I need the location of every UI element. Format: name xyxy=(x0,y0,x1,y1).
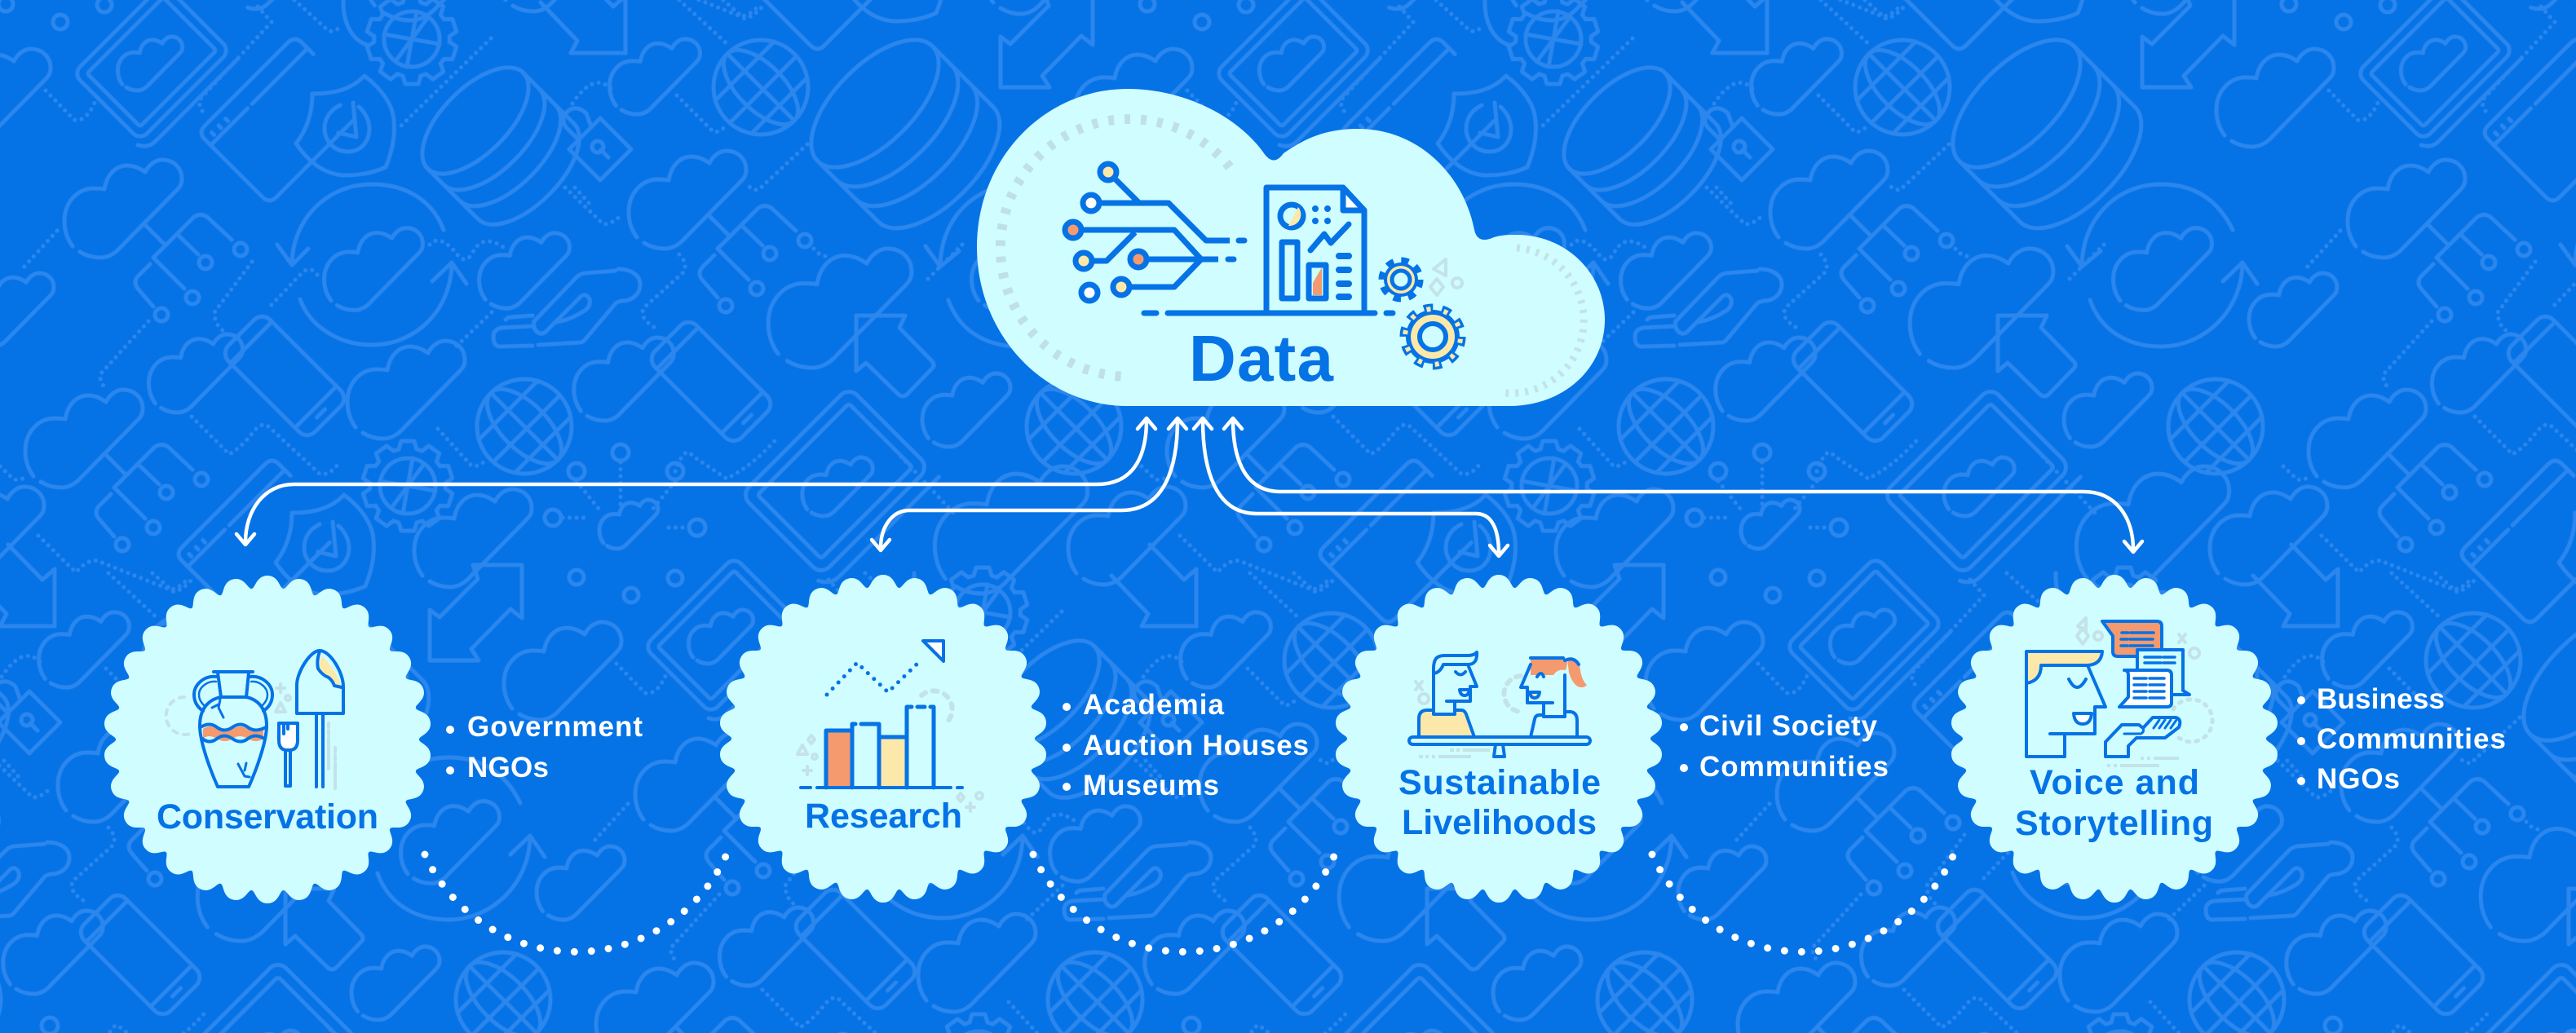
panel: voice and storytelling xyxy=(1950,575,2279,903)
icon: growth bar chart with arrow xyxy=(798,641,983,811)
icon: speaking face with speech bubbles and hand xyxy=(2026,618,2212,766)
list: research stakeholders: Auction Houses xyxy=(1083,730,1309,762)
list: sustainable livelihoods stakeholders: Communities xyxy=(1699,751,1889,783)
list: research stakeholders: Academia xyxy=(1083,689,1225,721)
title: Voice and Storytelling: Voice and xyxy=(2030,763,2199,802)
cloud shape xyxy=(977,89,1605,406)
list: conservation stakeholders: Government xyxy=(467,711,643,743)
title: Voice and Storytelling xyxy=(2015,763,2213,843)
icon: data report document xyxy=(1144,188,1393,313)
dotted arc inside cloud, left xyxy=(1001,119,1230,377)
list: conservation stakeholders: NGOs xyxy=(467,752,549,784)
list: voice and storytelling stakeholders: NGOs xyxy=(2317,763,2400,795)
title: Conservation: Conservation xyxy=(157,797,378,837)
list: sustainable livelihoods stakeholders xyxy=(1680,710,1889,783)
title: Voice and Storytelling: Storytelling xyxy=(2015,804,2213,843)
icon: large gear xyxy=(1405,309,1460,364)
title: Sustainable Livelihoods: Sustainable xyxy=(1398,763,1601,802)
icon: circuit connections xyxy=(1065,164,1244,301)
list: voice and storytelling stakeholders: Business xyxy=(2317,683,2445,715)
list: voice and storytelling stakeholders xyxy=(2297,683,2506,795)
title: Research: Research xyxy=(805,797,962,836)
panel: sustainable livelihoods xyxy=(1334,575,1664,903)
panel: data cloud xyxy=(977,89,1605,406)
scalloped badge xyxy=(103,576,432,903)
panel: conservation xyxy=(103,576,432,903)
icon: small gear xyxy=(1383,262,1419,298)
list: research stakeholders: Museums xyxy=(1083,770,1219,801)
dotted arc inside cloud, right xyxy=(1505,248,1584,393)
arrow: data to conservation xyxy=(236,418,1155,545)
arrow: data to sustainable livelihoods xyxy=(1194,418,1508,556)
scalloped badge xyxy=(1334,575,1664,903)
heading: Data: Data xyxy=(1189,322,1334,395)
scalloped badge xyxy=(1950,575,2279,903)
list: research stakeholders xyxy=(1063,689,1309,801)
list: sustainable livelihoods stakeholders: Civil Society xyxy=(1699,710,1878,742)
title: Sustainable Livelihoods: Livelihoods xyxy=(1402,803,1597,842)
list: conservation stakeholders xyxy=(446,711,643,784)
dotted connector: sustainable livelihoods to voice and storytelling xyxy=(1652,854,1954,951)
arrow: data to research xyxy=(872,418,1186,550)
dotted connector: research to sustainable livelihoods xyxy=(1033,854,1335,951)
decorative shapes xyxy=(1430,259,1462,295)
panel: research xyxy=(718,575,1048,903)
scalloped badge xyxy=(718,575,1048,903)
list: voice and storytelling stakeholders: Communities xyxy=(2317,723,2506,755)
arrow: data to voice and storytelling xyxy=(1224,418,2142,552)
dotted connector: conservation to research xyxy=(425,854,727,951)
title: Sustainable Livelihoods xyxy=(1398,763,1601,842)
icon: two people at a table xyxy=(1409,652,1590,757)
icon: cracked vase, brush and trowel xyxy=(166,651,343,788)
